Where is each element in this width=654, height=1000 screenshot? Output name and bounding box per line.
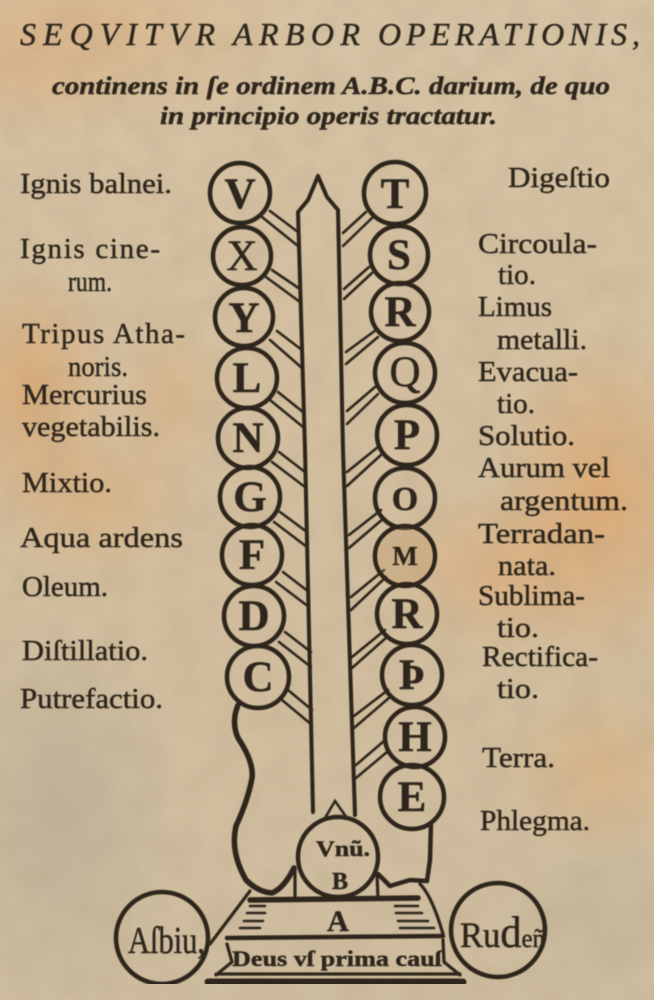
circle M: M: [392, 541, 418, 571]
circle H: [385, 707, 445, 767]
circle Asbiu: [116, 892, 208, 984]
label: Putrefactio: Putrefactio.: [20, 683, 163, 715]
circle V: [210, 163, 270, 223]
circle X: [213, 227, 271, 285]
circle L: [217, 348, 277, 408]
label: Distillatio: Diſtillatio.: [22, 635, 148, 667]
circle Q: Q: [389, 349, 421, 396]
label: Rectificatio: Rectifica-: [482, 641, 598, 673]
branches to right circles: [343, 212, 390, 778]
label: Terra damnata: nata.: [498, 550, 556, 582]
circle G: [220, 467, 280, 527]
circle C: [227, 646, 289, 708]
label: Limus metalli: Limus: [478, 291, 552, 323]
left column labels: [20, 168, 185, 715]
label: Ignis cinerum: rum.: [68, 266, 112, 298]
circle E: E: [398, 774, 426, 821]
circle N: [218, 408, 278, 468]
pedestal inscription: Deus vſ prima cauſ: [232, 946, 444, 971]
circle P: [377, 405, 437, 465]
circle P reversed: [382, 645, 442, 705]
label: Circoulatio: Circoula-: [478, 228, 597, 260]
circle F: [222, 525, 282, 585]
center circle Vnum B: Vnũ.: [316, 836, 370, 861]
label: Evacuatio: tio.: [497, 388, 535, 420]
circle T: T: [381, 171, 410, 218]
circle O: O: [392, 481, 418, 518]
label: Solutio: Solutio.: [478, 420, 575, 452]
subtitle line one: continens in ſe ordinem A.B.C. darium, de quo: [52, 73, 610, 100]
title heading: [20, 16, 640, 130]
label: Tripus Athanoris: noris.: [68, 351, 128, 383]
label: Limus metalli: metalli.: [497, 324, 587, 356]
label: Digestio: Digeſtio: [508, 162, 610, 194]
left letter circles: [210, 163, 289, 708]
title word OPERATIONIS: OPERATIONIS,: [378, 16, 640, 52]
label: Mercurius vegetabilis: vegetabilis.: [22, 411, 160, 443]
circle N: N: [232, 415, 264, 462]
title word SEQVITVR: SEQVITVR: [20, 16, 215, 52]
circle Y: [215, 288, 273, 346]
label: Circoulatio: tio.: [498, 259, 536, 291]
pedestal base: [208, 868, 463, 982]
circle D: [224, 586, 284, 646]
obelisk trunk: [298, 176, 355, 815]
label: Evacuatio: Evacua-: [478, 356, 578, 388]
circle L: L: [233, 355, 261, 402]
label: Phlegma: Phlegma.: [480, 805, 590, 837]
label: Terra: Terra.: [482, 742, 555, 774]
circle Ruden: [451, 883, 545, 977]
right column labels: [478, 162, 628, 837]
circle V: V: [224, 171, 256, 218]
center circle Vnum B: B: [332, 869, 348, 895]
circle H: H: [398, 714, 432, 761]
label: Mercurius vegetabilis: Mercurius: [22, 379, 147, 411]
circle T: [364, 162, 426, 224]
label: Aurum vel argentum: Aurum vel: [478, 452, 610, 484]
circle O: [375, 468, 435, 528]
circle S: S: [387, 232, 411, 279]
pedestal letter A: A: [327, 905, 349, 938]
label: Aurum vel argentum: argentum.: [500, 485, 628, 517]
circle F: F: [239, 532, 265, 579]
label: Ignis balnei: Ignis balnei.: [20, 168, 172, 200]
label: Tripus Athanoris: Tripus Atha-: [22, 318, 185, 350]
small triangle above center circle: [325, 801, 347, 818]
label: Sublimatio: Sublima-: [478, 580, 585, 612]
label: Mixtio: Mixtio.: [22, 467, 112, 499]
circle Ruden: Rudeñ: [460, 908, 545, 957]
circle Y: Y: [228, 295, 260, 342]
left root curve: [234, 705, 294, 893]
circle Q: [375, 343, 435, 403]
subtitle line two: in principio operis tractatur.: [160, 103, 497, 130]
center circle Vnum B: [298, 817, 378, 897]
circle Asbiu: Aſbiu,: [128, 920, 205, 962]
circle P: P: [394, 412, 420, 459]
circle C: C: [242, 654, 274, 701]
branches to left circles: [262, 211, 312, 725]
label: Sublimatio: tio.: [497, 612, 539, 644]
right root curve: [378, 823, 431, 886]
label: Ignis cinerum: Ignis cine-: [20, 233, 160, 265]
circle M: [375, 526, 435, 586]
circle R: [371, 283, 429, 341]
label: Rectificatio: tio.: [497, 673, 539, 705]
right letter circles: [364, 162, 445, 829]
title word ARBOR: ARBOR: [231, 16, 360, 52]
circle X: X: [226, 233, 258, 280]
label: Oleum: Oleum.: [22, 571, 108, 603]
circle R: R: [384, 289, 416, 336]
label: Aqua ardens: Aqua ardens: [20, 522, 183, 554]
circle R lower: R: [391, 591, 423, 638]
circle E: [380, 765, 444, 829]
circle G: G: [233, 474, 267, 521]
label: Terra damnata: Terradan-: [478, 518, 605, 550]
circle D: D: [238, 593, 270, 640]
tree diagram: [116, 162, 545, 984]
circle R lower: [377, 584, 437, 644]
circle S: [370, 226, 428, 284]
circle P reversed: Þ: [399, 652, 425, 699]
